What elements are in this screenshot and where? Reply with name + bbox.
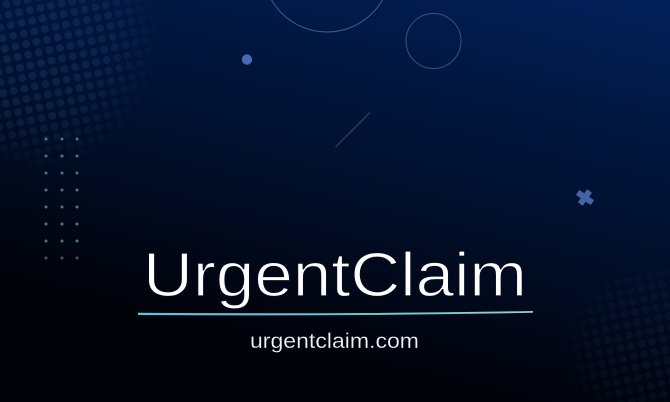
large circle outline — [263, 0, 391, 32]
blue dot — [242, 54, 252, 65]
domain name: urgentclaim.com — [250, 330, 419, 353]
underline — [138, 311, 533, 315]
icon: cross — [573, 186, 597, 209]
title: UrgentClaim — [143, 241, 527, 310]
diagonal line — [336, 112, 370, 147]
small circle outline — [406, 14, 461, 68]
dot grid — [44, 138, 78, 260]
halftone pattern: top left — [0, 0, 139, 154]
halftone pattern: bottom right — [586, 285, 670, 402]
